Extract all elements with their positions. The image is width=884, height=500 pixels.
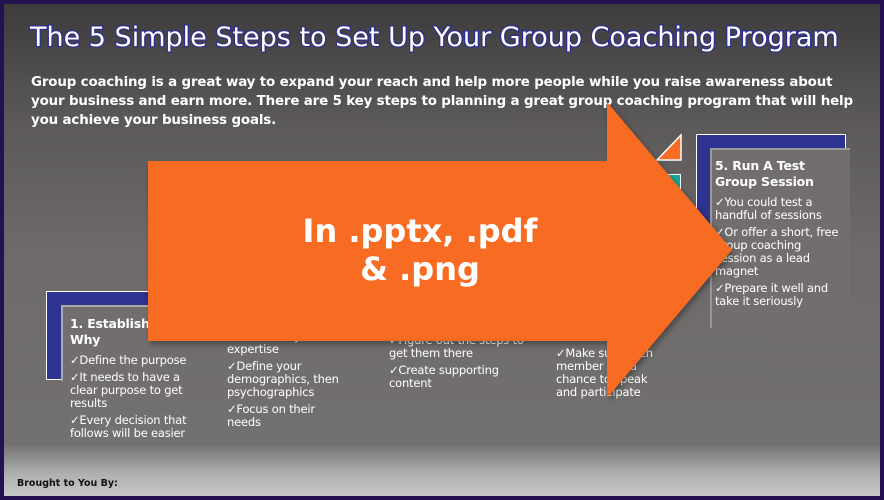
footer: Brought to You By: [17,478,118,489]
step 1 text: ✓Every decision that follows will be easier [70,413,186,440]
small triangle icon [656,133,682,161]
intro text: Group coaching is a great way to expand your reach and help more people while you raise awareness about your business and earn more. There are 5 key steps to planning a great group coaching program that will help you achieve your business goals. [31,75,853,128]
step 4 text: ✓Make sure each member has a chance to speak and participate [556,346,653,399]
arrow caption: & .png [360,250,480,288]
step 1 text: ✓Define the purpose [70,353,186,367]
step 4 text [556,316,653,399]
step 5 text: ✓You could test a handful of sessions [715,195,822,222]
step 5 text: 5. Run A Test Group Session [715,158,814,189]
step 2 text: ✓Focus on their needs [227,402,315,429]
step 2 text: ✓Start with your expertise [227,329,319,356]
step 2 text [227,329,339,429]
title: The 5 Simple Steps to Set Up Your Group Coaching Program [30,22,839,53]
step 2 text: ✓Define your demographics, then psychographics [227,359,339,399]
step 3 text: ✓Figure out the steps to get them there [389,333,524,360]
step 4 text: ✓Assign homework [556,316,615,343]
step 5 text: ✓Or offer a short, free group coaching session as a lead magnet [715,225,838,278]
step 5 text [715,158,838,308]
step 1 box [46,291,156,380]
step 3 text [389,333,524,390]
step 5 text: ✓Prepare it well and take it seriously [715,281,828,308]
teal block [657,174,681,214]
step 3 text: ✓Create supporting content [389,363,499,390]
step 1 text: ✓It needs to have a clear purpose to get results [70,370,182,410]
arrow caption [303,212,538,288]
arrow caption: In .pptx, .pdf [303,212,537,250]
step 1 text [70,316,186,440]
step 1 text: 1. Establish Your Why [70,316,185,347]
step 5 box [696,134,846,244]
